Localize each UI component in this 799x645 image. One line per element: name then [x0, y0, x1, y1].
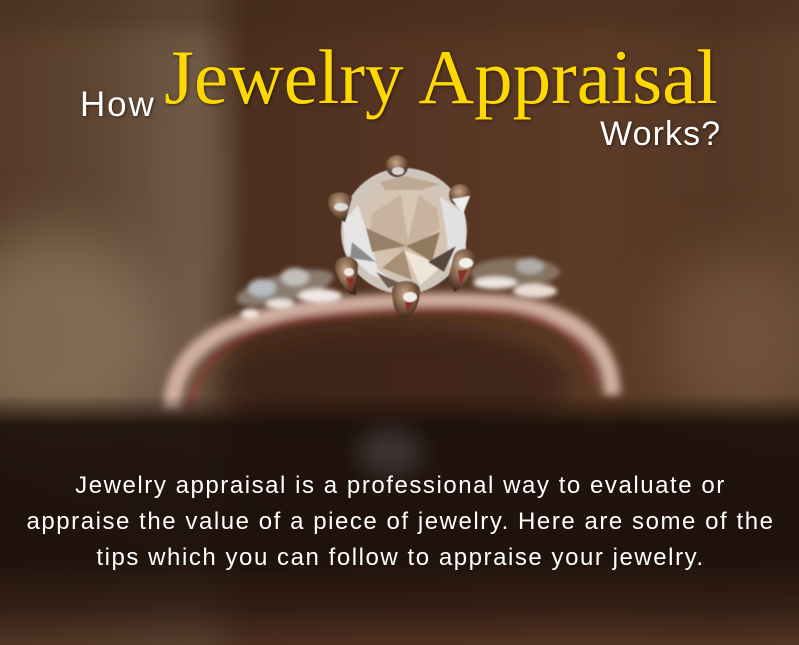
diamond — [341, 168, 467, 294]
prongs — [328, 155, 476, 318]
description text: appraise the value of a piece of jewelry. Here are some of the — [26, 508, 774, 535]
description text: Jewelry appraisal is a professional way to evaluate or — [75, 472, 726, 499]
inside of band shadow — [220, 327, 570, 443]
title word: Works?: Works? — [600, 115, 721, 153]
side stones — [233, 258, 560, 319]
description text — [26, 472, 774, 571]
description text: tips which you can follow to appraise your jewelry. — [96, 544, 705, 571]
ring band — [172, 301, 612, 410]
title — [80, 34, 721, 153]
title main: Jewelry Appraisal: Jewelry Appraisal — [164, 34, 718, 120]
title word: How: How — [80, 85, 156, 124]
